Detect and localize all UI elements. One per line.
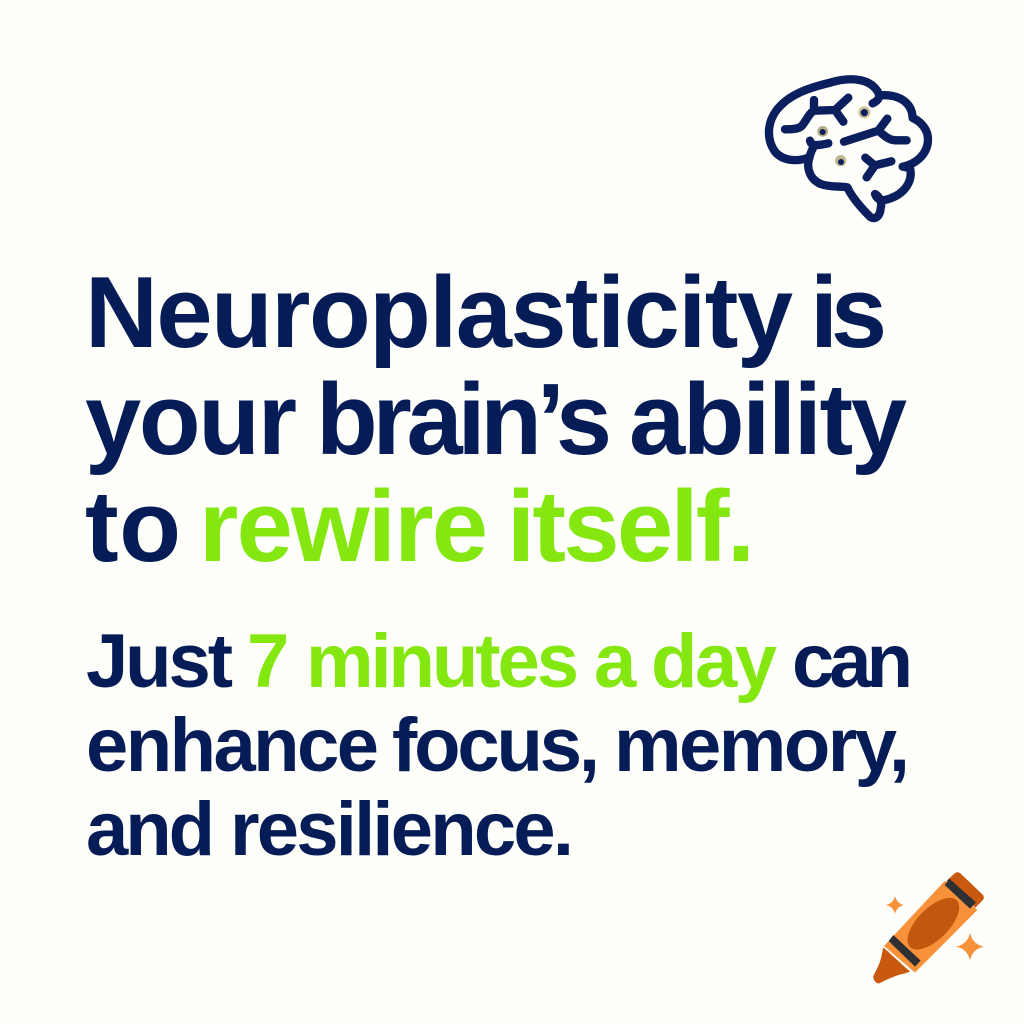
title: your xyxy=(85,364,297,476)
subheading: 7 xyxy=(247,619,289,704)
title: brain’s xyxy=(316,364,612,476)
subheading: can xyxy=(792,619,913,704)
title xyxy=(85,257,907,583)
title: to xyxy=(85,471,181,583)
subheading: memory, xyxy=(614,703,910,788)
subheading: Just xyxy=(86,619,233,704)
icon: brain xyxy=(769,79,928,218)
subheading: and xyxy=(86,787,215,872)
title: itself. xyxy=(507,471,755,583)
subheading: a xyxy=(594,619,637,704)
subheading: day xyxy=(651,619,777,704)
title: rewire xyxy=(199,471,488,583)
subheading: resilience. xyxy=(230,787,574,872)
icon: crayon with sparkles xyxy=(873,872,984,983)
title: ability xyxy=(629,364,907,476)
subheading xyxy=(86,619,913,872)
subheading: focus, xyxy=(392,703,600,788)
subheading: enhance xyxy=(86,703,379,788)
title: Neuroplasticity xyxy=(85,257,793,369)
subheading: minutes xyxy=(306,619,579,704)
title: is xyxy=(810,257,887,369)
